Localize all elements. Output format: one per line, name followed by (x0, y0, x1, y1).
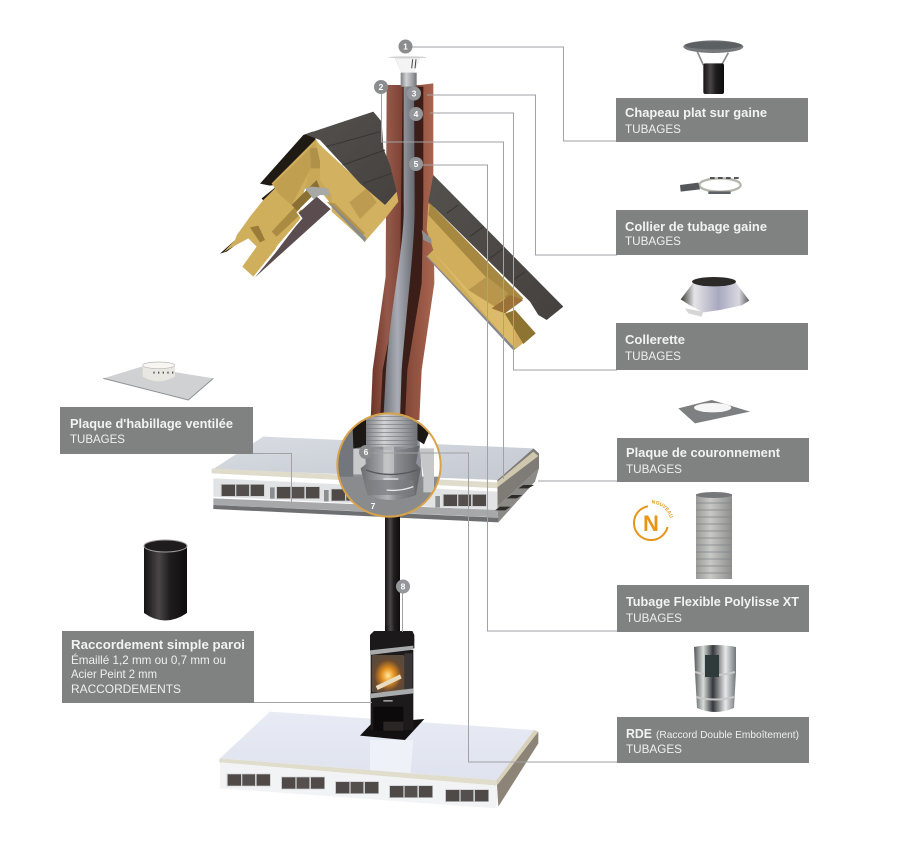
icon: black enamel pipe (144, 540, 187, 620)
label: Chapeau plat sur gaine: TUBAGES (625, 122, 681, 136)
label: Plaque d'habillage ventilée (60, 407, 253, 454)
icon: new badge (632, 500, 674, 541)
label: RDE (617, 717, 809, 763)
shingles (305, 112, 397, 205)
badge 1 (398, 40, 412, 54)
floor slab with cutaway joist blocks (212, 437, 539, 522)
roof: right slope (422, 175, 563, 351)
badge 8: 8 (401, 582, 406, 592)
stove on floor plate (360, 625, 424, 740)
label: RDE: TUBAGES (626, 742, 682, 756)
label: Tubage Flexible Polylisse XT: TUBAGES (626, 611, 682, 625)
label: RDE: (Raccord Double Emboîtement) (656, 729, 799, 741)
label: Raccordement simple paroi: Raccordement simple paroi (71, 638, 245, 652)
label: Raccordement simple paroi (62, 631, 254, 703)
magnifier lens: flue connection (337, 412, 443, 522)
icon: flashing collar (681, 277, 749, 317)
label: Tubage Flexible Polylisse XT (617, 585, 809, 632)
icon: flat cap (683, 40, 743, 94)
icon: RDE fitting (694, 645, 736, 712)
number 7: 7 (371, 501, 376, 511)
badge 4: 4 (414, 109, 419, 119)
black connector pipe (385, 515, 400, 635)
label: Collerette: Collerette (625, 333, 685, 347)
label: Plaque de couronnement: TUBAGES (626, 462, 682, 476)
label: RDE: RDE (626, 727, 652, 741)
badge 3 (407, 86, 421, 100)
flexible flue liner (383, 87, 415, 420)
icon: crown plate (678, 400, 750, 423)
label: Collier de tubage gaine (616, 210, 808, 255)
label: Raccordement simple paroi: RACCORDEMENTS (71, 682, 181, 696)
badge 2 (374, 80, 388, 94)
label: Plaque de couronnement (617, 438, 809, 482)
icon: new badge: NOUVEAU (652, 500, 674, 518)
chimney (371, 83, 434, 420)
badge 5: 5 (414, 159, 419, 169)
label: Collerette (616, 323, 808, 370)
icon: ventilated plate (103, 362, 213, 400)
badge 6 (359, 445, 373, 459)
label: Raccordement simple paroi: Acier Peint 2 mm (71, 667, 157, 681)
badge 8 (396, 580, 410, 594)
badge 2: 2 (379, 82, 384, 92)
connector lines (253, 47, 617, 762)
roof: left slope (220, 112, 398, 278)
label: Plaque de couronnement: Plaque de couronnement (626, 446, 781, 460)
label: Collier de tubage gaine: Collier de tubage gaine (625, 220, 767, 234)
label: Plaque d'habillage ventilée: TUBAGES (70, 432, 125, 446)
label: Raccordement simple paroi: Émaillé 1,2 mm ou 0,7 mm ou (71, 652, 226, 667)
label: Plaque d'habillage ventilée: Plaque d'habillage ventilée (70, 417, 233, 431)
badge 4 (409, 107, 423, 121)
icon: flexible liner (696, 492, 732, 579)
underside lining (255, 197, 331, 277)
badge 1: 1 (403, 42, 408, 52)
icon: new badge: N (643, 511, 659, 536)
badge 6: 6 (364, 447, 369, 457)
badge 3: 3 (412, 88, 417, 98)
floor 2 slab (219, 712, 538, 808)
label: Collerette: TUBAGES (625, 349, 681, 363)
label: Collier de tubage gaine: TUBAGES (625, 234, 681, 248)
badge 5 (409, 157, 423, 171)
label: Chapeau plat sur gaine: Chapeau plat sur gaine (625, 106, 767, 120)
label: Chapeau plat sur gaine (616, 98, 808, 142)
label: Tubage Flexible Polylisse XT: Tubage Flexible Polylisse XT (626, 595, 799, 609)
icon: collar (680, 178, 742, 193)
cowl on chimney top (388, 56, 427, 87)
